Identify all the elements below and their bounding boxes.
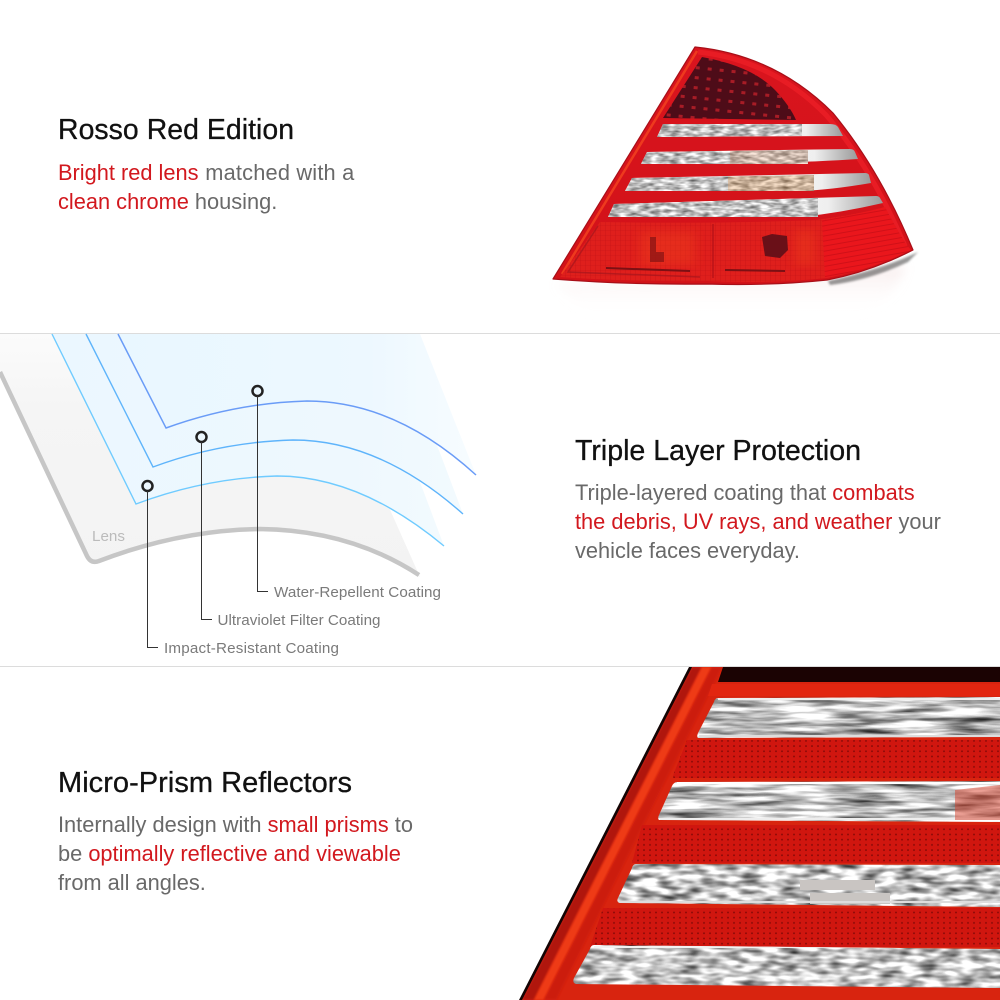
- frame red stripe: [708, 684, 1000, 696]
- outer bright rim: [698, 52, 905, 246]
- text block: Rosso description: matched with a: [199, 160, 355, 185]
- clear reflector 4: [565, 943, 1000, 989]
- clear strip 2: [641, 149, 858, 164]
- cast shadow: [828, 252, 918, 285]
- callout: water-repellent: Water-Repellent Coating: [274, 584, 441, 601]
- coating sheet: ultraviolet: [86, 334, 463, 514]
- red prism band 3: [590, 908, 1000, 947]
- dark reflector spot: [762, 234, 788, 258]
- text block: Triple Layer description: the debris, UV rays, and weather: [575, 509, 892, 534]
- text block: Triple Layer description: your: [892, 509, 941, 534]
- text block: Micro-Prism description: from all angles.: [58, 870, 206, 895]
- dark upper strip: [718, 667, 1000, 682]
- bright frame band: [534, 667, 712, 1000]
- lens body: [0, 334, 420, 577]
- orange glow: [640, 230, 815, 265]
- dark red outer band: [522, 667, 702, 1000]
- callout: water-repellent: [252, 386, 441, 601]
- text block: Rosso description: housing.: [189, 189, 277, 214]
- coating sheet: water-repellent: [118, 334, 476, 475]
- ribbed right section: [822, 207, 911, 278]
- layer line: impact-resistant: [52, 334, 444, 546]
- dark lens marks: [606, 267, 785, 272]
- lens edge: [0, 372, 419, 575]
- clear strip 4: [604, 196, 883, 218]
- text: Lens: Lens: [92, 528, 125, 545]
- layer line: ultraviolet: [86, 334, 463, 514]
- heading: Triple Layer Protection: Triple Layer Protection: [575, 435, 861, 467]
- callout: ultraviolet: [196, 432, 380, 629]
- image: tail light close-up: [519, 667, 1000, 1000]
- callout: impact-resistant: Impact-Resistant Coating: [164, 640, 339, 657]
- callout: impact-resistant: [142, 481, 339, 657]
- clear strip 3: [625, 173, 871, 191]
- heading: Rosso Red Edition: Rosso Red Edition: [58, 114, 294, 146]
- text block: Micro-Prism description: be: [58, 841, 88, 866]
- coating sheet: impact-resistant: [52, 334, 444, 546]
- section: Rosso Red Edition: [58, 46, 918, 287]
- black outer edge: [519, 667, 692, 1000]
- red prism band 1: [673, 740, 1000, 778]
- reflection: [556, 266, 905, 318]
- text block: Triple Layer description: vehicle faces everyday.: [575, 538, 800, 563]
- section: Micro-Prism Reflectors: [58, 667, 1000, 1000]
- text block: Rosso description: Bright red lens: [58, 160, 199, 185]
- text block: Rosso description: clean chrome: [58, 189, 189, 214]
- clear strip 1: [657, 124, 843, 137]
- lamp housing: [553, 47, 913, 284]
- text block: Micro-Prism description: Internally design with: [58, 812, 268, 837]
- red frame: [520, 667, 1000, 1000]
- clear reflector 1: [697, 697, 1000, 738]
- divider lines: [0, 334, 1000, 666]
- heading: Micro-Prism Reflectors: Micro-Prism Reflectors: [58, 767, 352, 799]
- text block: Micro-Prism description: small prisms to: [268, 812, 413, 837]
- layer line: water-repellent: [118, 334, 476, 475]
- red prism band 2: [632, 825, 1000, 863]
- diagram: lens coating layers: [0, 334, 476, 657]
- clear reflector 3: [617, 864, 1000, 907]
- lower red lens: [560, 207, 911, 282]
- text block: Triple Layer description: combats: [832, 480, 915, 505]
- lower left inner rim: [568, 226, 700, 277]
- image: red tail light: [552, 46, 918, 287]
- section: Triple Layer Protection: [0, 334, 941, 657]
- dark upper lens: [663, 57, 796, 120]
- text block: Triple Layer description: Triple-layered coating that: [575, 480, 832, 505]
- callout: ultraviolet: Ultraviolet Filter Coating: [218, 612, 380, 629]
- clear reflector 2: [650, 780, 1000, 822]
- text block: Micro-Prism description: optimally reflective and viewable: [88, 841, 401, 866]
